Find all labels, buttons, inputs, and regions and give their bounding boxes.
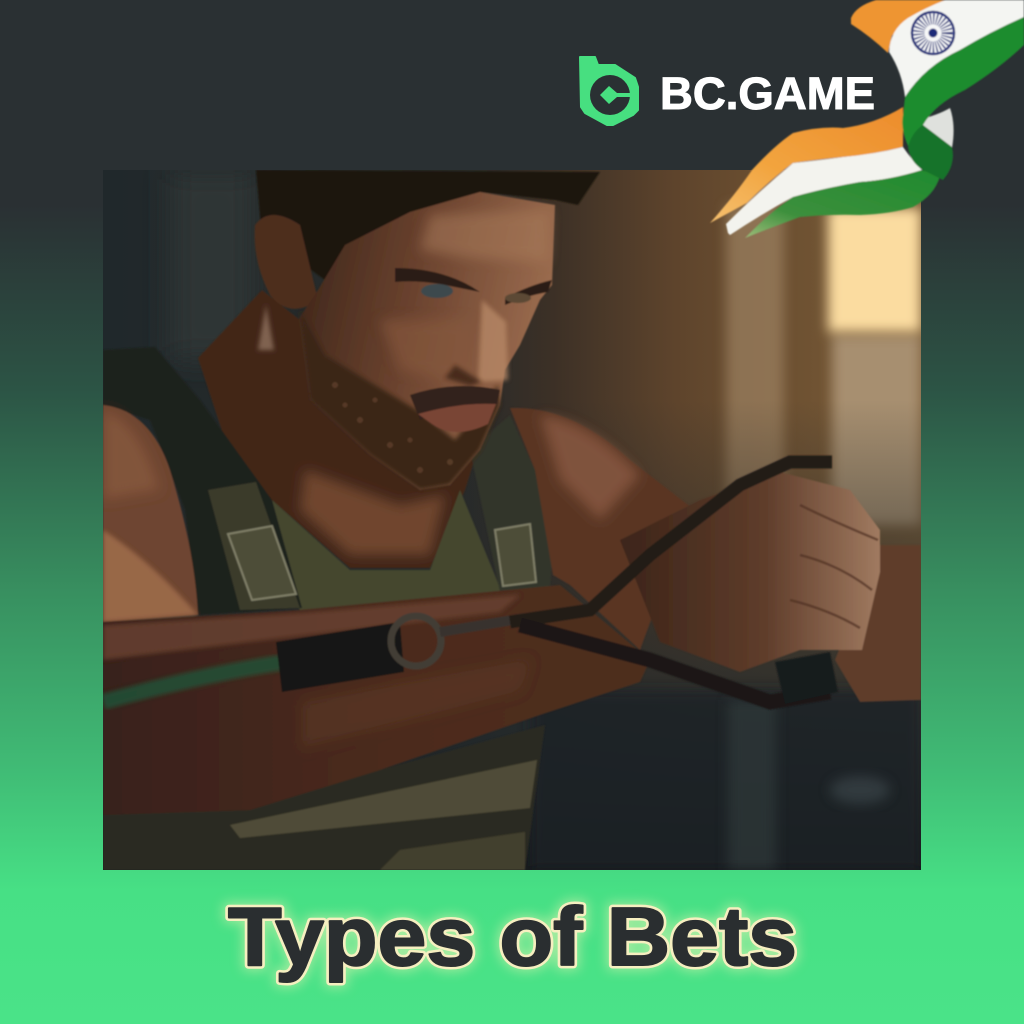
ear [255, 215, 318, 309]
saffron band top [851, 0, 945, 53]
left vest strap [103, 347, 302, 615]
beard [300, 310, 500, 490]
title with glow: Types of Bets [228, 890, 797, 983]
photo panel: athlete with resistance band [103, 170, 921, 870]
resistance band [103, 462, 838, 704]
India flag ribbon [710, 0, 1024, 238]
right shoulder and upper arm [510, 408, 692, 650]
beard texture [332, 382, 453, 473]
face [298, 192, 555, 490]
hair [256, 170, 600, 285]
mouth [410, 386, 500, 420]
logo mark [580, 57, 638, 125]
white band lower [726, 147, 922, 235]
tank top [272, 490, 505, 612]
forearm [103, 585, 650, 815]
fold white [918, 108, 954, 148]
saffron band lower [710, 107, 903, 223]
right strap patch [495, 524, 536, 586]
gym background [103, 170, 921, 870]
neck and chest [198, 290, 490, 568]
logo wordmark: BC.GAME [660, 68, 875, 119]
title with glow: Types of Bets [228, 890, 797, 983]
fist [620, 472, 880, 672]
Ashoka chakra [912, 12, 954, 54]
left strap patch [228, 526, 296, 600]
green band lower [745, 170, 940, 238]
vest lower body [103, 725, 545, 870]
right vest strap [470, 415, 552, 592]
white band top [889, 0, 1024, 97]
eyes and brows [395, 268, 552, 305]
title with glow: Types of Bets [228, 890, 797, 983]
right wrist [835, 545, 921, 702]
nose [478, 300, 508, 382]
athlete figure [103, 170, 921, 870]
brand logo [580, 57, 875, 125]
green band top [902, 17, 1024, 150]
left shoulder [103, 405, 198, 622]
fold green [908, 125, 953, 180]
